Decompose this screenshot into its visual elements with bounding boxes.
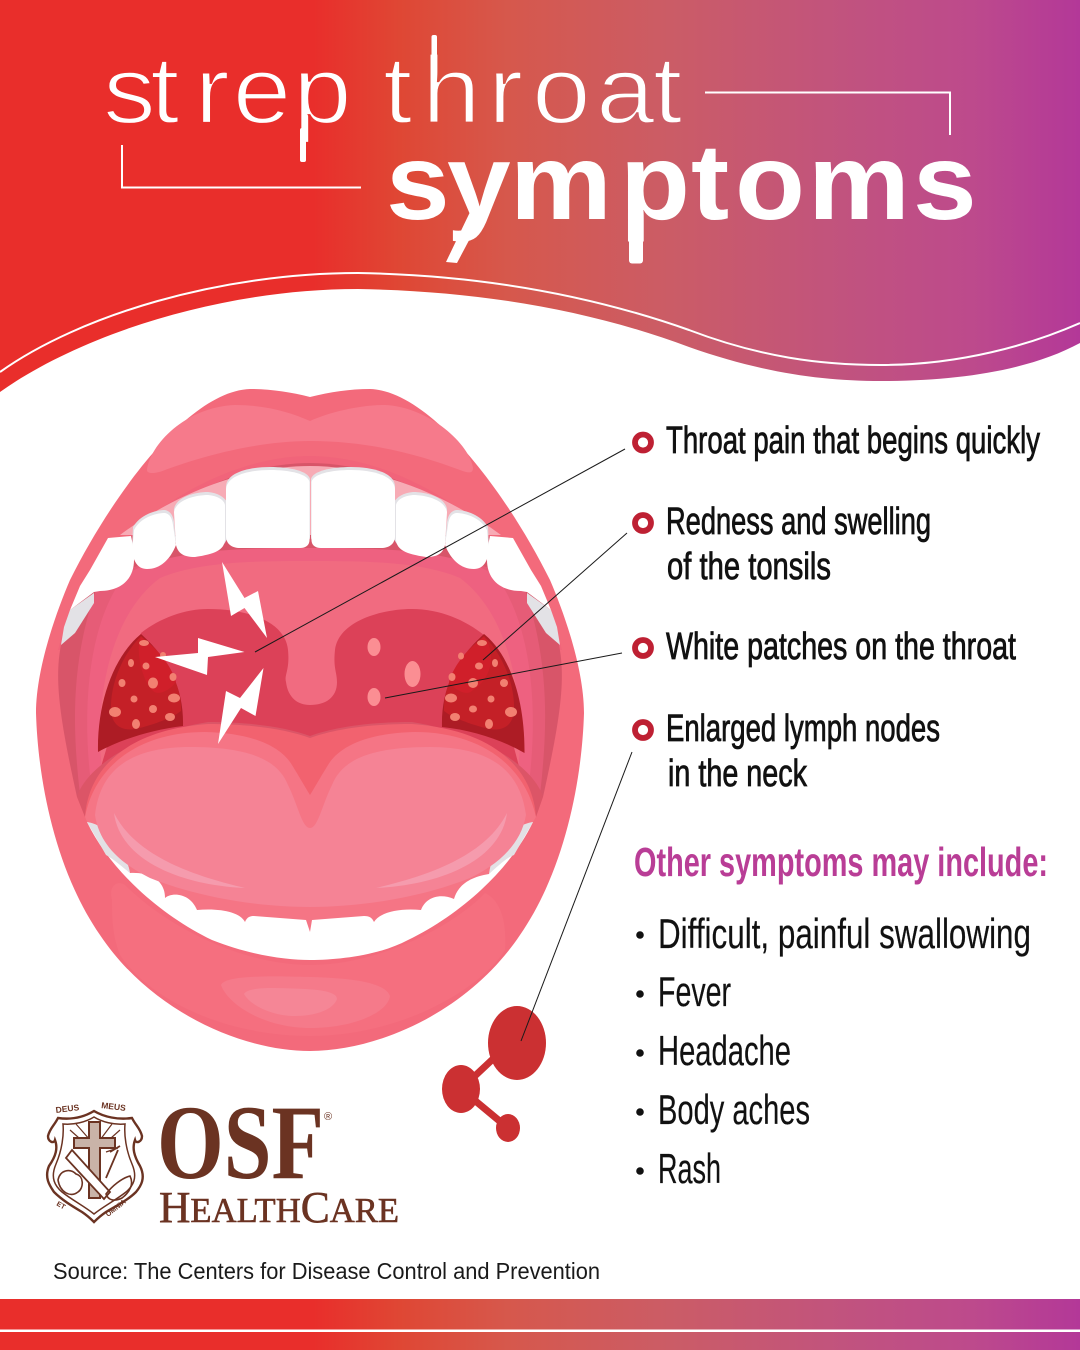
logo rays xyxy=(70,1124,120,1152)
white patches xyxy=(368,638,420,706)
logo arms xyxy=(66,1146,120,1199)
outer lips xyxy=(36,389,584,1051)
logo clouds xyxy=(58,1171,132,1200)
upper lip highlight xyxy=(147,405,473,473)
tongue middle and lower gum xyxy=(85,732,536,932)
title frame bottom left xyxy=(122,145,361,188)
soft palate shade xyxy=(87,548,533,775)
upper teeth right xyxy=(311,467,560,645)
other symptoms list: Headache xyxy=(658,1027,791,1074)
tongue base xyxy=(85,724,536,822)
tongue crescent right xyxy=(376,813,507,888)
footer bars xyxy=(0,1299,1080,1350)
header gradient wave xyxy=(0,0,1080,392)
throat xyxy=(100,609,520,770)
header banner xyxy=(0,0,1080,392)
lower lip shine xyxy=(221,976,390,1028)
mouth illustration xyxy=(36,389,584,1051)
symptom: redness and swelling: Redness and swelling xyxy=(666,501,931,543)
symptom: enlarged lymph nodes xyxy=(635,708,940,795)
other symptoms list: Rash xyxy=(658,1145,721,1192)
mouth cavity xyxy=(58,463,562,797)
tongue top xyxy=(95,747,526,907)
palate xyxy=(100,561,520,770)
upper lip inner band xyxy=(58,456,562,650)
lower side teeth grey xyxy=(87,822,533,874)
other symptoms list xyxy=(636,910,1031,1192)
other symptoms list: Fever xyxy=(658,968,731,1015)
pain bolts xyxy=(155,562,267,744)
symptom: enlarged lymph nodes: in the neck xyxy=(668,753,808,795)
logo shield: OMNIA xyxy=(105,1199,128,1219)
title line: symptoms: symptoms xyxy=(386,121,977,242)
logo shield: MEUS xyxy=(101,1100,127,1113)
OSF HealthCare logo xyxy=(47,1084,399,1232)
lower lip shine inner xyxy=(244,988,337,1016)
wave white line xyxy=(0,273,1080,372)
lower teeth base xyxy=(87,822,533,960)
symptom: redness and swelling: of the tonsils xyxy=(667,546,831,588)
cavity layer xyxy=(75,548,545,795)
symptom: redness and swelling xyxy=(635,501,931,588)
tongue edge xyxy=(77,722,543,817)
right tonsil xyxy=(442,634,525,753)
logo HealthCare wordmark: HEALTHCARE xyxy=(159,1183,399,1232)
logo cross xyxy=(74,1122,115,1198)
upper teeth left xyxy=(61,467,310,645)
callout lines xyxy=(255,449,632,1041)
tongue crescent left xyxy=(114,813,245,888)
lower lip highlight xyxy=(111,883,505,1036)
gum xyxy=(120,466,501,535)
logo shield: ET xyxy=(55,1201,67,1212)
logo OSF wordmark: OSF xyxy=(157,1084,324,1201)
symptom: enlarged lymph nodes: Enlarged lymph nodes xyxy=(666,708,940,750)
lymph nodes xyxy=(442,1006,546,1142)
upper teeth xyxy=(61,467,560,645)
title line: strep throat: strep throat xyxy=(103,37,682,144)
other symptoms list: Body aches xyxy=(658,1086,810,1133)
title frame top right xyxy=(705,92,950,135)
left tonsil xyxy=(98,634,183,752)
logo registered mark: ® xyxy=(324,1111,332,1123)
logo motto: DEUS xyxy=(55,1102,80,1115)
logo shield xyxy=(47,1100,143,1222)
source line: Source: The Centers for Disease Control and Prevention xyxy=(53,1258,600,1284)
